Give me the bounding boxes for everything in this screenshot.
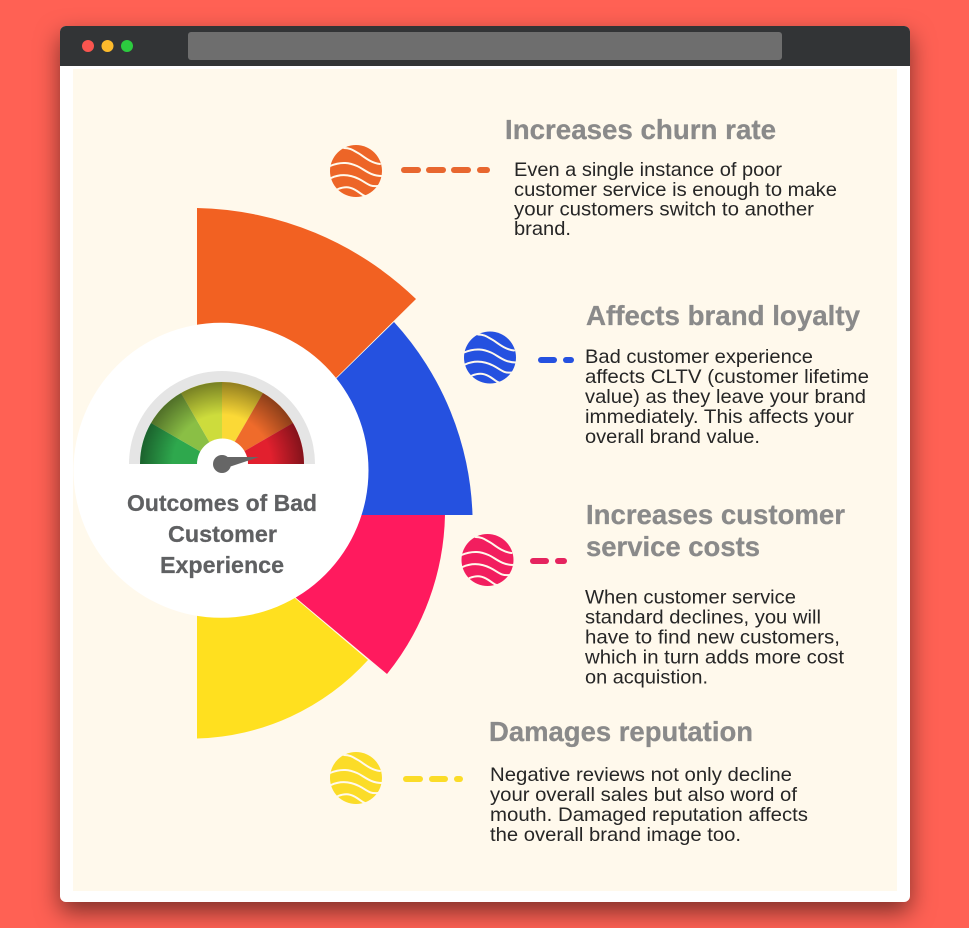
- text: churn rate description: your customers switch to another: [514, 198, 815, 220]
- text: service costs description: have to find new customers,: [585, 626, 840, 648]
- text: reputation description: [490, 764, 808, 846]
- text: brand loyalty description: immediately. This affects your: [585, 406, 855, 428]
- text: reputation description: Negative reviews not only decline: [490, 764, 792, 786]
- cream panel: [73, 69, 897, 891]
- icon: blue wavy circle: [464, 332, 516, 384]
- text: churn rate description: brand.: [514, 218, 571, 240]
- text: service costs description: standard declines, you will: [585, 606, 821, 628]
- text: brand loyalty description: Bad customer experience: [585, 346, 813, 368]
- center title: Experience: [160, 552, 284, 578]
- text: brand loyalty description: value) as they leave your brand: [585, 386, 866, 408]
- text: brand loyalty description: [585, 346, 869, 448]
- text: churn rate description: [514, 159, 837, 240]
- heading: damages reputation: Damages reputation: [489, 716, 753, 747]
- text: service costs description: [584, 586, 845, 688]
- text: churn rate description: customer service is enough to make: [514, 179, 837, 201]
- center title: [127, 490, 317, 578]
- fan chart wedges: [197, 208, 472, 738]
- connector: yellow dashes: [403, 776, 463, 782]
- browser title bar: [60, 26, 910, 66]
- text: brand loyalty description: affects CLTV (customer lifetime: [585, 366, 869, 388]
- icon: pink wavy circle: [462, 534, 514, 586]
- text: brand loyalty description: overall brand value.: [585, 426, 760, 448]
- heading: increases customer service costs: [586, 499, 845, 562]
- center title: Customer: [168, 521, 277, 547]
- connector: orange dashes: [401, 167, 490, 173]
- text: reputation description: the overall brand image too.: [490, 824, 741, 846]
- text: service costs description: which in turn adds more cost: [584, 646, 845, 668]
- connector: blue dashes: [538, 357, 574, 363]
- heading: affects brand loyalty: Affects brand loyalty: [586, 300, 860, 331]
- text: service costs description: When customer service: [585, 586, 796, 608]
- gauge icon: [129, 371, 315, 490]
- text: churn rate description: Even a single instance of poor: [514, 159, 783, 181]
- icon: orange wavy circle: [330, 145, 382, 197]
- heading: increases churn rate: Increases churn rate: [505, 114, 776, 145]
- text: reputation description: mouth. Damaged reputation affects: [490, 804, 808, 826]
- heading: increases customer service costs: service costs: [586, 531, 760, 562]
- text: reputation description: your overall sales but also word of: [490, 784, 798, 806]
- central white circle: [74, 323, 368, 618]
- connector: pink dashes: [530, 558, 567, 564]
- icon: yellow wavy circle: [330, 752, 382, 804]
- center title: Outcomes of Bad: [127, 490, 317, 516]
- text: service costs description: on acquistion.: [585, 666, 708, 688]
- heading: increases customer service costs: Increases customer: [586, 499, 845, 530]
